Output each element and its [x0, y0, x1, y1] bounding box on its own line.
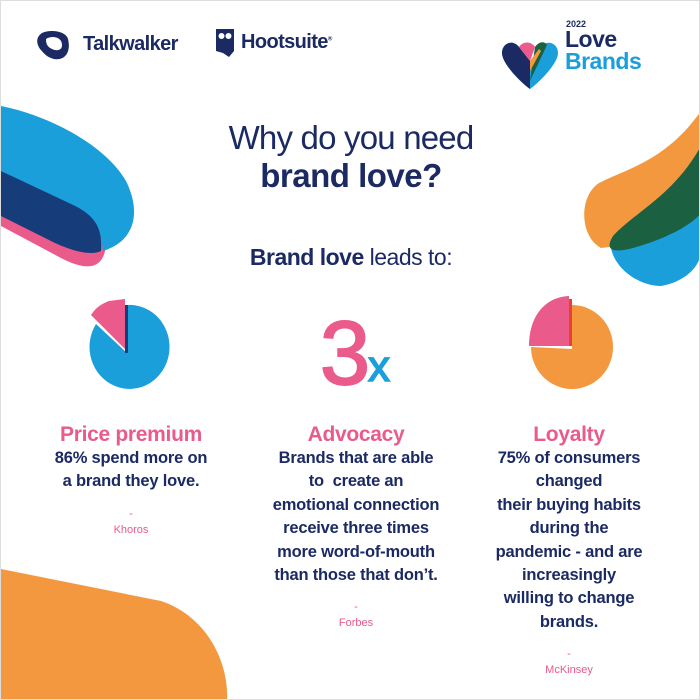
column: price premium: Price premium	[60, 423, 202, 446]
title: Why do you need	[229, 119, 473, 156]
column: loyalty: Loyalty	[533, 423, 605, 446]
column: loyalty: pandemic - and are	[496, 543, 642, 561]
column: loyalty: McKinsey	[545, 664, 593, 676]
blob: left	[1, 106, 134, 266]
blob: right	[584, 111, 700, 286]
logo: Talkwalker	[37, 31, 178, 60]
column: price premium: 86% spend more on	[55, 449, 207, 467]
column: advocacy: Forbes	[339, 617, 373, 629]
logo: Talkwalker: Talkwalker	[83, 33, 178, 55]
logo: 2022 Love Brands	[502, 19, 641, 89]
title	[228, 119, 473, 194]
pie chart: 75%	[529, 296, 613, 389]
logo: 2022 Love Brands: 2022	[566, 19, 586, 29]
column: advocacy: to create an	[309, 472, 403, 490]
logo: Hootsuite	[216, 29, 332, 57]
logo: 2022 Love Brands: Brands	[565, 48, 641, 74]
column: advocacy: more word-of-mouth	[277, 543, 435, 561]
column: loyalty: changed	[536, 472, 602, 490]
stat: 3x: 3	[320, 304, 370, 404]
column: loyalty: during the	[530, 519, 608, 537]
column: price premium: Khoros	[114, 524, 148, 536]
column: advocacy: than those that don’t.	[274, 566, 438, 584]
pie chart: 86%	[90, 299, 170, 389]
column: price premium: a brand they love.	[63, 472, 199, 490]
subtitle: Brand love leads to:	[250, 244, 452, 270]
column: loyalty: 75% of consumers	[498, 449, 640, 467]
stat: 3x: x	[368, 342, 390, 391]
column: loyalty: their buying habits	[497, 496, 641, 514]
blob: bottom-left orange	[1, 569, 227, 700]
column: advocacy: Brands that are able	[279, 449, 433, 467]
title: brand love?	[260, 157, 442, 194]
column: price premium: -	[129, 508, 133, 520]
column: advocacy: emotional connection	[273, 496, 439, 514]
column: advocacy: -	[354, 601, 358, 613]
logo: Hootsuite: Hootsuite®	[241, 31, 332, 53]
column: loyalty: increasingly	[522, 566, 616, 584]
column: loyalty	[496, 423, 642, 676]
column: advocacy	[273, 423, 439, 629]
column: advocacy: receive three times	[283, 519, 429, 537]
column: advocacy: Advocacy	[308, 423, 404, 446]
column: price premium	[55, 423, 207, 536]
logo: 2022 Love Brands: Love	[565, 26, 617, 52]
column: loyalty: willing to change	[504, 589, 634, 607]
column: loyalty: brands.	[540, 613, 598, 631]
column: loyalty: -	[567, 648, 571, 660]
